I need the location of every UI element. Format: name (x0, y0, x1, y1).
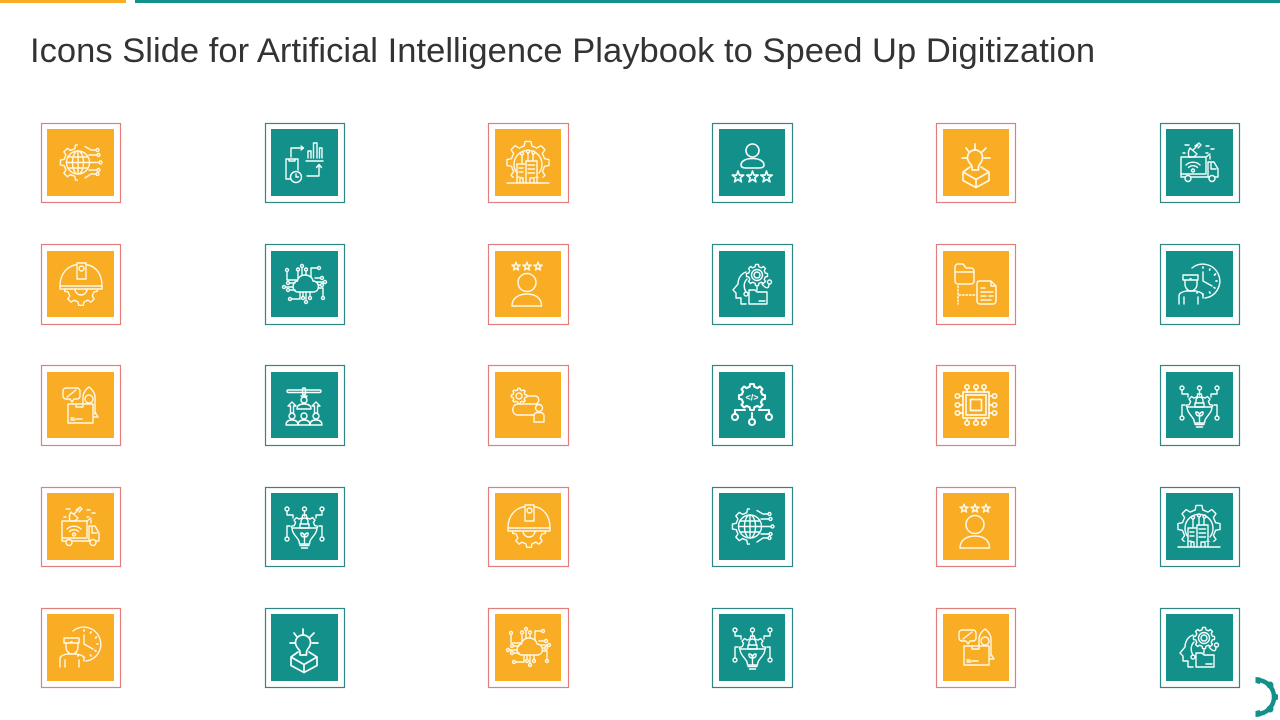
icon: corner half gear logo (1256, 677, 1278, 717)
icon: mobile analytics (286, 143, 323, 182)
accent bar: orange (0, 0, 126, 3)
tile: bulb circuit lock (712, 608, 792, 688)
icon: hard hat gear (508, 505, 550, 547)
icon: idea box (962, 144, 990, 188)
icon: folder and document (955, 264, 996, 304)
icon: bulb circuit lock (1180, 386, 1219, 427)
accent bar: teal (135, 0, 1280, 3)
icon: smart building gear (1178, 505, 1220, 548)
icon: microchip (955, 385, 997, 425)
tile: mobile analytics (266, 124, 344, 202)
tile: person with stars (488, 244, 568, 324)
tile: connected truck (42, 488, 120, 566)
tile: connected truck (1160, 124, 1240, 202)
icon: idea box (290, 629, 318, 672)
tile: rocket box (42, 366, 120, 446)
icon: rocket box (959, 629, 994, 665)
icon: connected truck (62, 507, 99, 546)
tile: bulb circuit lock (1160, 366, 1240, 446)
icon: head gear folder (1180, 627, 1218, 667)
tile: smart building gear (1160, 488, 1240, 566)
icon: global network gear (732, 509, 774, 544)
icon: cloud circuit (506, 628, 550, 666)
icon: process to person (511, 388, 544, 422)
icon: bulb circuit lock (733, 628, 772, 669)
tile: rocket box (936, 608, 1016, 688)
icon: hard hat gear (60, 263, 102, 305)
icon: rocket box (63, 387, 98, 423)
icon: team hierarchy arrows (286, 388, 322, 425)
tile: microchip (936, 366, 1016, 446)
tile: cloud circuit (488, 608, 568, 688)
icon: worker with clock (1179, 264, 1220, 304)
tile: hard hat gear (42, 244, 120, 324)
tile: rated person (712, 124, 792, 202)
icon: code gear (732, 384, 772, 425)
tile: person with stars (936, 488, 1016, 566)
tile: process to person (488, 366, 568, 446)
tile: head gear folder (712, 244, 792, 324)
tile: team hierarchy arrows (266, 366, 344, 446)
tile: global network gear (42, 124, 120, 202)
tile: idea box (936, 124, 1016, 202)
tile: worker with clock (42, 608, 120, 688)
icon: smart building gear (507, 141, 549, 184)
tile: idea box (266, 608, 344, 688)
icon: worker with clock (60, 627, 101, 667)
tile: bulb circuit lock (266, 488, 344, 566)
tile: worker with clock (1160, 244, 1240, 324)
tile: head gear folder (1160, 608, 1240, 688)
tile: smart building gear (488, 124, 568, 202)
tile: cloud circuit (266, 244, 344, 324)
tile: code gear (712, 366, 792, 446)
title: Icons Slide for Artificial Intelligence Playbook to Speed Up Digitization (30, 32, 1095, 70)
icon: connected truck (1181, 143, 1218, 182)
icon: person with stars (512, 262, 542, 306)
tile: folder and document (936, 244, 1016, 324)
tile: global network gear (712, 488, 792, 566)
icon: cloud circuit (282, 264, 326, 304)
icon: head gear folder (733, 264, 772, 304)
icon: person with stars (960, 504, 990, 548)
tile: hard hat gear (488, 488, 568, 566)
icon: global network gear (60, 145, 102, 180)
icon: bulb circuit lock (285, 507, 324, 548)
icon: rated person (732, 144, 772, 182)
